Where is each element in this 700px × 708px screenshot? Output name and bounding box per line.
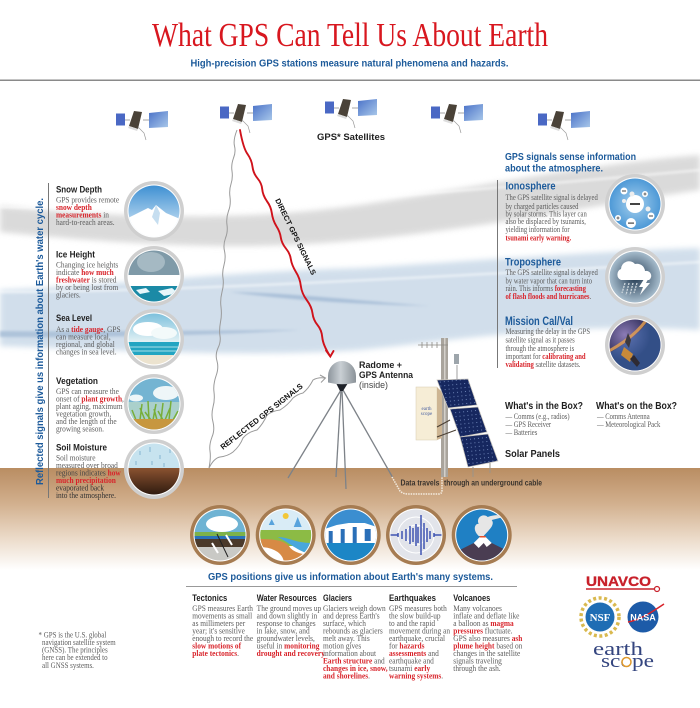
column: volcanoes: signals traveling: [453, 656, 502, 666]
panel: ice height: how much: [81, 268, 114, 277]
panel: ice height: glaciers.: [56, 290, 81, 300]
column: tectonics: GPS measures Earth: [192, 604, 253, 613]
column: glaciers: information about: [323, 649, 377, 658]
panel: soil moisture: into the atmosphere.: [56, 491, 116, 500]
column: earthquakes: and: [428, 649, 439, 658]
satellite 2: [220, 104, 272, 133]
panel: ice height: [56, 246, 184, 306]
logo: UNAVCO: [586, 574, 660, 592]
panel: what's in the box: What's in the Box?: [505, 400, 583, 412]
panel: mission cal/val: calibrating and: [542, 352, 586, 361]
panel: ionosphere: tsunami early warning.: [505, 233, 571, 243]
label: direct GPS signals: DIRECT GPS SIGNALS: [273, 197, 318, 276]
column: earthquakes: [389, 593, 450, 681]
panel: troposphere: [505, 247, 665, 307]
panel: mission cal/val: Measuring the delay in the GPS: [505, 327, 590, 336]
column: water resources: useful in: [257, 641, 284, 651]
column: tectonics: enough to record the: [192, 634, 254, 643]
radome and tripod: [288, 361, 393, 489]
panel: soil moisture: how: [108, 468, 121, 478]
column: glaciers: Glaciers weigh down: [323, 604, 386, 613]
logo: UNAVCO: UNAVCO: [586, 574, 651, 589]
panel: mission cal/val: satellite datasets.: [535, 359, 580, 369]
icon: storm cloud: [605, 247, 665, 307]
panel: what's on the box: — Meteorological Pack: [596, 419, 661, 429]
panel: sea level: Sea Level: [56, 313, 92, 324]
panel: ice height: is stored: [92, 275, 117, 285]
column: glaciers: and depress Earth's: [323, 611, 380, 621]
column: earthquakes: to and the rapid: [389, 619, 435, 628]
column: volcanoes: GPS also measures: [453, 634, 512, 643]
column: glaciers: surface, which: [323, 619, 366, 628]
column: earthquakes: the slow build-up: [389, 611, 441, 621]
panel: mission cal/val: important for: [505, 352, 542, 361]
icon: ice and water: [124, 246, 184, 306]
column: volcanoes: a balloon as: [453, 619, 490, 628]
panel: sea level: tide gauge, GPS: [71, 325, 121, 334]
panel: mission cal/val: through the atmosphere is: [505, 343, 574, 353]
footnote: here can be extended to: [42, 653, 108, 662]
icon: glaciers: [321, 505, 381, 565]
satellite 4: [431, 104, 483, 133]
direct signal path with arrow: [240, 130, 334, 356]
panel: sea level: [56, 309, 184, 369]
header rule: [0, 80, 700, 81]
panel: snow depth: GPS provides remote: [56, 195, 120, 205]
logo: NSF: NSF: [590, 612, 611, 624]
column: earthquakes: GPS measures both: [389, 604, 447, 613]
panel: soil moisture: evaporated back: [56, 483, 104, 493]
panel: sea level: regional, and global: [56, 340, 116, 349]
logo: EarthScope: scope: [601, 652, 654, 672]
column: water resources: drought and recovery: [257, 649, 325, 658]
panel: snow depth: hard-to-reach areas.: [56, 218, 115, 227]
panel: mission cal/val: validating: [505, 359, 534, 369]
panel: ionosphere: [505, 174, 665, 243]
panel: troposphere: of flash floods and hurricanes: [505, 292, 590, 301]
label: radome and antenna: Radome +: [359, 360, 402, 371]
panel: ionosphere: by charged particles caused: [505, 201, 579, 211]
panel: vegetation: vegetation growth,: [56, 409, 111, 419]
footnote: navigation satellite system: [42, 638, 116, 647]
icon: grass: [124, 374, 184, 434]
footnote: (GNSS). The principles: [42, 645, 108, 655]
label: radome and antenna: [359, 360, 414, 391]
column: glaciers: melt away. This: [323, 634, 370, 643]
panel: troposphere: The GPS satellite signal is delayed: [505, 268, 598, 277]
panel: mission cal/val: satellite signal as it passes: [505, 335, 575, 345]
column: volcanoes: Volcanoes: [453, 593, 490, 604]
panel: snow depth: [56, 181, 184, 241]
column: earthquakes: Earthquakes: [389, 593, 436, 604]
panel: snow depth: snow depth: [56, 203, 92, 212]
column: earthquakes: tsunami: [389, 664, 414, 673]
column: volcanoes: Many volcanoes: [453, 604, 502, 613]
panel: ice height: by or being lost from: [56, 283, 118, 292]
panel: ionosphere: yielding information for: [505, 225, 570, 234]
column: glaciers: Earth structure: [323, 656, 373, 666]
panel: troposphere: rain. This informs: [505, 284, 555, 293]
column: earthquakes: earthquake and: [389, 656, 434, 666]
title: What GPS Can Tell Us About Earth: [152, 17, 548, 54]
column: earthquakes: movement during an: [389, 626, 450, 636]
panel: soil moisture: much precipitation: [56, 476, 117, 485]
panel: ionosphere: Ionosphere: [506, 180, 556, 192]
panel: what's on the box: What's on the Box?: [596, 400, 677, 412]
column: glaciers: .: [368, 671, 370, 681]
side heading: atmosphere: GPS signals sense information: [505, 151, 636, 163]
column: earthquakes: earthquake, crucial: [389, 634, 446, 643]
logo: EarthScope: earth: [593, 640, 643, 660]
column: water resources: The ground moves up: [257, 604, 321, 613]
panel: troposphere: .: [590, 292, 591, 301]
label: solar panels: Solar Panels: [505, 449, 560, 460]
column: tectonics: as millimeters per: [192, 619, 246, 628]
label: cable note: through an underground cable: [444, 479, 543, 488]
panel: soil moisture: regions indicates: [56, 468, 108, 478]
column: tectonics: movements as small: [192, 611, 253, 621]
column: tectonics: Tectonics: [192, 593, 227, 604]
icon: tectonics: [190, 505, 250, 565]
column: glaciers: changes in ice, snow,: [323, 664, 388, 673]
icon: volcano: [452, 505, 512, 565]
column: tectonics: [192, 593, 254, 658]
panel: what's in the box: [505, 400, 583, 437]
icon: sea and beach: [124, 309, 184, 369]
panel: what's in the box: — Batteries: [505, 427, 537, 437]
panel: ice height: indicate: [56, 268, 81, 277]
label: cable note: [400, 479, 543, 488]
icon: water resources: [256, 505, 316, 565]
column: volcanoes: changes in the satellite: [453, 649, 521, 658]
divider: water cycle panel: [48, 183, 49, 498]
panel: snow depth: Snow Depth: [56, 184, 102, 196]
panel: mission cal/val: [505, 315, 665, 375]
side heading: atmosphere: about the atmosphere.: [505, 162, 603, 174]
column: glaciers: and shorelines: [323, 671, 368, 681]
column: volcanoes: plume height: [453, 641, 495, 651]
satellite 3: [325, 99, 377, 128]
panel: troposphere: forecasting: [555, 284, 586, 293]
panel: vegetation: [56, 374, 184, 434]
column: earthquakes: assessments: [389, 649, 426, 658]
ground gradient: [0, 468, 700, 570]
heading: Earth systems: GPS positions give us information about Earth's many systems.: [208, 571, 493, 583]
logo: NASA: NASA: [630, 612, 656, 622]
column: tectonics: slow motions of: [192, 641, 241, 651]
panel: ionosphere: also be displaced by tsunamis,: [505, 217, 586, 226]
side heading: water cycle: Reflected signals give us information about Earth's water cycle.: [34, 198, 46, 485]
column: glaciers: [323, 593, 388, 681]
column: earthquakes: .: [441, 671, 443, 681]
label: cable note: Data travels: [400, 479, 440, 488]
column: volcanoes: pressures: [453, 626, 483, 636]
side heading: atmosphere: [505, 151, 636, 174]
column: water resources: Water Resources: [257, 593, 317, 604]
panel: ionosphere: by solar storms. This layer can: [505, 209, 587, 219]
label: radome and antenna: GPS Antenna: [359, 370, 414, 381]
column: earthquakes: for: [389, 641, 399, 651]
panel: vegetation: plant growth,: [81, 394, 124, 404]
enclosure box: [416, 387, 456, 440]
column: tectonics: .: [237, 649, 239, 658]
column: water resources: .: [325, 649, 327, 658]
panel: what's on the box: — Comms Antenna: [596, 411, 650, 421]
panel: what's in the box: — Comms (e.g., radios): [505, 411, 570, 421]
column: volcanoes: inflate and deflate like: [453, 611, 520, 621]
panel: sea level: can measure local,: [56, 332, 111, 342]
column: water resources: [257, 593, 327, 658]
column: water resources: in lake, snow, and: [257, 626, 310, 636]
panel: troposphere: by water vapor that can turn into: [505, 276, 592, 286]
equipment mast and antenna: [418, 338, 459, 477]
divider: atmosphere panel: [497, 180, 498, 368]
footnote: * GPS is the U.S. global: [39, 630, 106, 640]
panel: vegetation: growing season.: [56, 424, 104, 434]
column: volcanoes: magma: [490, 619, 514, 628]
column: water resources: response to changes: [257, 619, 316, 628]
panel: ice height: Ice Height: [56, 250, 96, 260]
logo: NSF: [581, 598, 619, 636]
panel: what's on the box: [596, 400, 677, 429]
column: glaciers: motion gives: [323, 641, 361, 651]
panel: sea level: As a: [56, 325, 71, 334]
logo: NASA: [628, 602, 664, 632]
icon: soil and rain: [124, 439, 184, 499]
label: GPS satellites: GPS* Satellites: [317, 132, 385, 143]
panel: sea level: changes in sea level.: [56, 347, 117, 357]
panel: snow depth: in: [103, 210, 109, 220]
column: glaciers: Glaciers: [323, 593, 352, 604]
column: earthquakes: warning systems: [389, 671, 441, 681]
column: volcanoes: [453, 593, 523, 673]
column: tectonics: year; it's sensitive: [192, 626, 245, 636]
satellite 5: [538, 111, 590, 140]
panel: ice height: freshwater: [56, 275, 90, 285]
subtitle: High-precision GPS stations measure natural phenomena and hazards.: [190, 58, 509, 70]
solar panels: [437, 379, 498, 477]
divider: Earth systems: [186, 586, 517, 587]
panel: ice height: Changing ice heights: [56, 260, 118, 270]
column: earthquakes: early: [414, 664, 430, 673]
column: tectonics: plate tectonics: [192, 649, 237, 658]
label: reflected GPS signals: REFLECTED GPS SIGNALS: [219, 382, 305, 452]
icon: snowy mountain: [124, 181, 184, 241]
panel: soil moisture: measured over broad: [56, 461, 118, 470]
panel: soil moisture: Soil moisture: [56, 453, 96, 463]
column: glaciers: and: [374, 656, 385, 666]
panel: snow depth: measurements: [56, 210, 101, 220]
panel: vegetation: plant aging, maximum: [56, 402, 123, 411]
label: radome and antenna: (inside): [359, 380, 388, 391]
column: water resources: monitoring: [284, 641, 320, 651]
column: volcanoes: through the ash.: [453, 664, 501, 673]
box logo: earth: [422, 407, 432, 412]
column: glaciers: rebounds as glaciers: [323, 626, 383, 636]
panel: ionosphere: The GPS satellite signal is delayed: [505, 193, 598, 202]
footnote: all GNSS systems.: [42, 660, 94, 670]
icon: charged particles: [605, 174, 665, 234]
panel: troposphere: Troposphere: [505, 256, 561, 268]
icon: satellite over earth: [605, 315, 665, 375]
column: water resources: groundwater levels,: [257, 634, 315, 643]
panel: mission cal/val: Mission Cal/Val: [505, 316, 573, 328]
panel: what's in the box: — GPS Receiver: [505, 419, 552, 429]
satellite 1: [116, 111, 168, 140]
logo: EarthScope: [593, 640, 654, 672]
panel: vegetation: Vegetation: [56, 376, 98, 387]
column: volcanoes: fluctuate.: [485, 626, 512, 636]
column: earthquakes: hazards: [399, 641, 424, 651]
column: water resources: and down slightly in: [257, 611, 317, 621]
box logo: scope: [421, 412, 433, 417]
panel: vegetation: onset of: [56, 394, 81, 404]
atmosphere wave backdrop: [0, 155, 700, 353]
panel: vegetation: GPS can measure the: [56, 387, 119, 396]
reflected signal path with arrow: [209, 130, 326, 468]
panel: soil moisture: Soil Moisture: [56, 442, 107, 454]
panel: soil moisture: [56, 439, 184, 500]
panel: vegetation: and the length of the: [56, 417, 117, 426]
column: volcanoes: ash: [512, 634, 523, 643]
icon: earthquakes: [386, 505, 446, 565]
underground cable: [392, 477, 442, 494]
column: volcanoes: based on: [496, 641, 522, 651]
